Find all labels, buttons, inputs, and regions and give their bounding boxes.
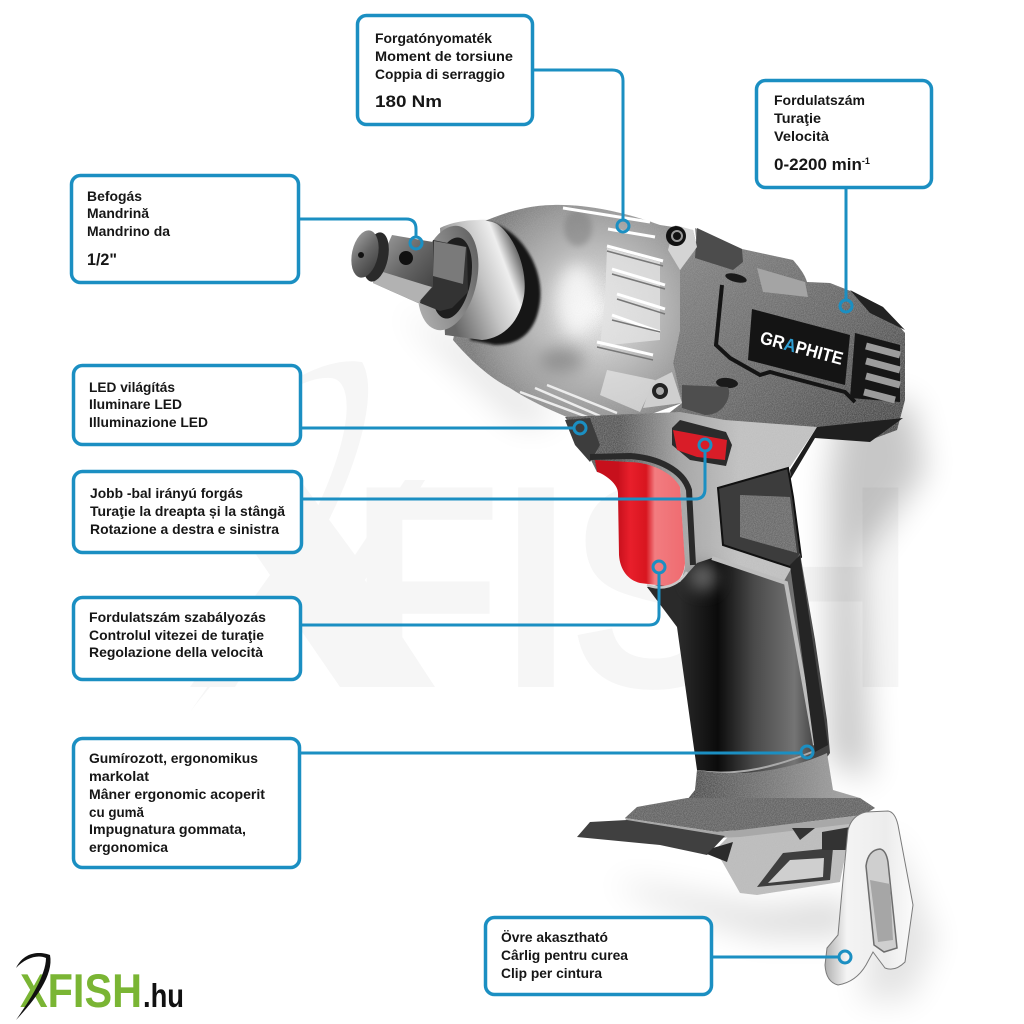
- logo: XFISH.hu: [16, 953, 184, 1020]
- callout: torque: Coppia di serraggio: [375, 66, 505, 82]
- callout: torque: [358, 16, 629, 232]
- callout: LED: [74, 366, 586, 444]
- anvil: square drive and detent: [347, 228, 468, 311]
- callout: rotation direction: Rotazione a destra e sinistra: [90, 521, 279, 537]
- nose cylinder: [440, 220, 525, 340]
- callout: speed: -1: [862, 156, 870, 166]
- callout: grip: ergonomica: [89, 839, 168, 855]
- callout: belt clip: [486, 918, 851, 994]
- callout: speed control: Fordulatszám szabályozás: [89, 609, 266, 625]
- callout: torque: Moment de torsiune: [375, 48, 513, 64]
- rear motor housing: [660, 228, 905, 470]
- screws: [643, 225, 729, 415]
- red trigger: [595, 460, 685, 586]
- battery base: [577, 753, 875, 895]
- callout: chuck: Mandrino da: [87, 223, 170, 239]
- logo: XFISH.hu: .hu: [143, 977, 184, 1014]
- upper shade: [564, 210, 592, 246]
- housing shade: [540, 348, 584, 372]
- LED cluster: [565, 418, 600, 462]
- callout: rotation direction: Jobb -bal irányú forgás: [90, 485, 243, 501]
- callout: grip: cu gumă: [89, 804, 144, 820]
- callout: rotation direction: [74, 439, 711, 552]
- nose front face: [409, 220, 487, 336]
- callout: speed: Fordulatszám: [774, 92, 865, 108]
- rubber grip: [647, 553, 830, 777]
- watermark: XFISH: [190, 361, 915, 749]
- callout: chuck: [72, 176, 422, 282]
- callout: speed control: Controlul vitezei de turaţie: [89, 627, 264, 643]
- impact wrench: [347, 205, 913, 985]
- callout: rotation direction: Turaţie la dreapta și la stângă: [90, 503, 285, 519]
- callout: speed: 0-2200 min: [774, 155, 862, 174]
- logo plate: [748, 309, 850, 385]
- watermark: XFISH: FISH: [350, 425, 915, 749]
- handle neck: [565, 412, 817, 640]
- air vents: [850, 333, 900, 402]
- tool shadow: [400, 310, 935, 1000]
- hammer case: silver housing: [453, 205, 697, 417]
- trigger bottom arc: [647, 572, 687, 587]
- callout: speed control: [74, 561, 665, 680]
- callout: grip: Impugnatura gommata,: [89, 821, 246, 837]
- callout: belt clip: Cârlig pentru curea: [501, 947, 628, 963]
- logo text: GRAPHITE: [758, 328, 845, 369]
- callout: grip: markolat: [89, 768, 149, 784]
- nose opening: [426, 234, 478, 322]
- callout: LED: Iluminare LED: [89, 396, 182, 412]
- callout: chuck: 1/2": [87, 250, 117, 269]
- base neck: [687, 753, 875, 835]
- callout: torque: Forgatónyomaték: [375, 30, 492, 46]
- red direction switch: [672, 420, 732, 466]
- callout: speed: [756, 80, 932, 312]
- top facet: [757, 268, 808, 297]
- slot top: [724, 271, 748, 285]
- grip light band: [712, 558, 815, 745]
- housing ribs: [520, 208, 665, 418]
- side recess outline: [716, 285, 855, 402]
- housing highlight: [557, 264, 597, 336]
- trigger guard: [590, 456, 693, 565]
- callout: grip: Gumírozott, ergonomikus: [89, 750, 258, 766]
- clip inner slot: [866, 849, 897, 952]
- callout: grip: [74, 738, 813, 868]
- callout: chuck: Mandrină: [87, 205, 149, 221]
- grip upper blend: [689, 563, 717, 591]
- base front lower plate: [577, 820, 725, 855]
- slot bottom: [716, 377, 738, 389]
- lower grip edge: [698, 752, 812, 773]
- logo: XFISH.hu: XFISH: [20, 964, 142, 1017]
- dark motor cap: [695, 228, 743, 270]
- dark under motor: [790, 418, 903, 555]
- belt clip: [825, 811, 913, 985]
- callout: speed: Turaţie: [774, 110, 821, 126]
- callout: grip: Mâner ergonomic acoperit: [89, 786, 265, 802]
- callout: belt clip: Övre akasztható: [501, 929, 608, 945]
- callout: belt clip: Clip per cintura: [501, 965, 602, 981]
- grip panel: [718, 468, 801, 567]
- dark diamond: [707, 842, 733, 862]
- silver base side: [715, 822, 852, 895]
- callout: LED: Illuminazione LED: [89, 414, 208, 430]
- callout: speed: Velocità: [774, 128, 829, 144]
- callout: chuck: Befogás: [87, 188, 142, 204]
- dark ring behind nose: [470, 222, 541, 345]
- callout: speed control: Regolazione della velocità: [89, 644, 263, 660]
- callout: torque: 180 Nm: [375, 92, 442, 111]
- base upper plate: [625, 798, 875, 832]
- callout: LED: LED világítás: [89, 379, 175, 395]
